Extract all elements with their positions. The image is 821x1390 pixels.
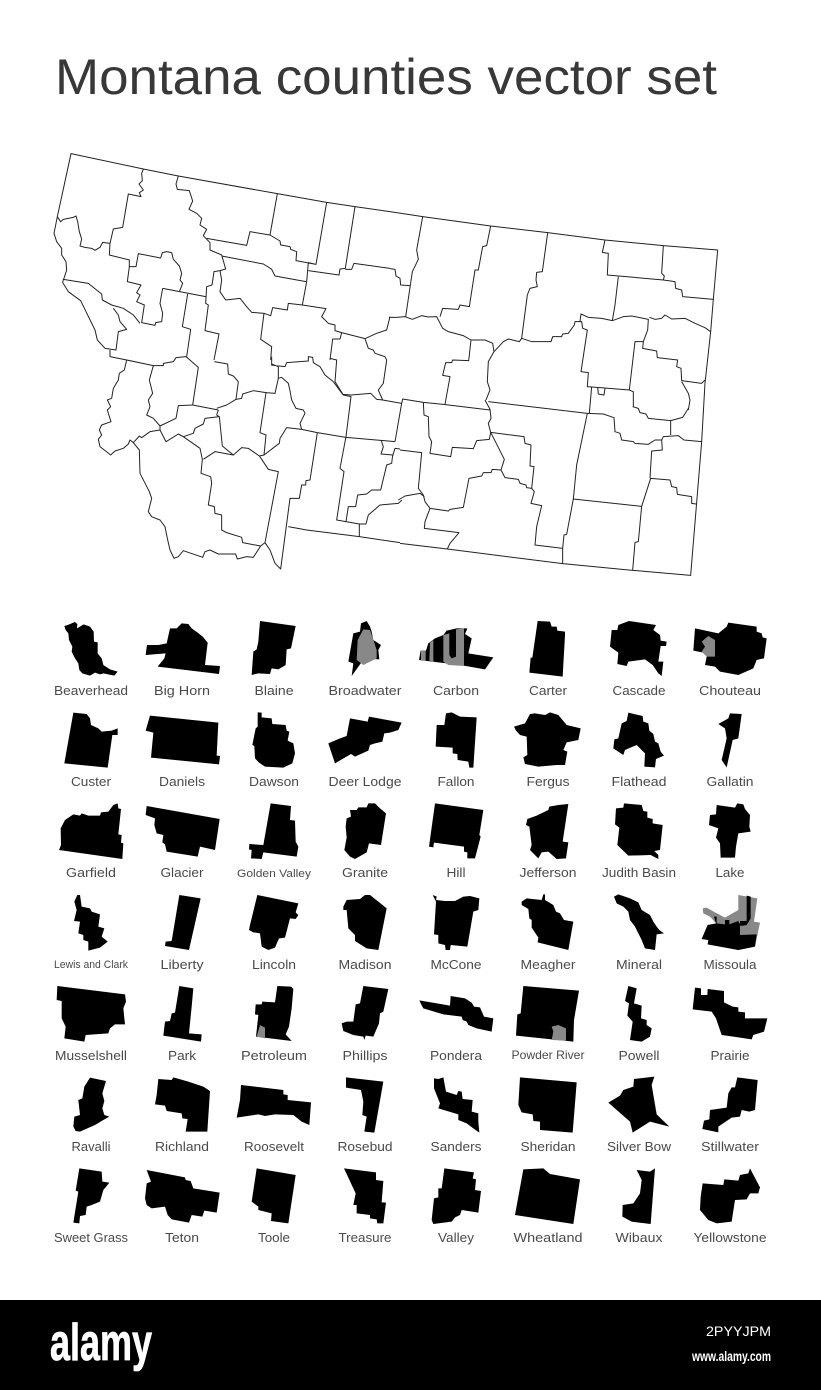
- county: Richland: [155, 1077, 210, 1154]
- county: Broadwater: [328, 621, 402, 698]
- county: Pondera: Pondera: [430, 1048, 483, 1063]
- county: Lewis and Clark: Lewis and Clark: [54, 959, 128, 971]
- county: Toole: [252, 1168, 296, 1245]
- county: Yellowstone: [694, 1168, 766, 1245]
- county: Powder River: [512, 986, 584, 1062]
- county: Prairie: [693, 988, 767, 1063]
- county: Silver Bow: [607, 1077, 672, 1154]
- county: Deer Lodge: [328, 717, 402, 789]
- county: Fallon: [436, 712, 477, 789]
- county: Powell: Powell: [618, 1048, 660, 1063]
- county: Garfield: Garfield: [66, 865, 116, 880]
- county: McCone: McCone: [430, 957, 482, 972]
- county: Dawson: Dawson: [249, 774, 299, 789]
- county: Ravalli: [72, 1078, 111, 1154]
- title: Montana counties vector set: [55, 49, 717, 105]
- county: Fergus: Fergus: [526, 774, 570, 789]
- county: Carter: [529, 621, 568, 698]
- county: Teton: [145, 1170, 220, 1245]
- county: Carter: Carter: [529, 683, 568, 698]
- county: Rosebud: [338, 1077, 392, 1154]
- county: Musselshell: Musselshell: [55, 1048, 127, 1063]
- county: Toole: Toole: [258, 1230, 290, 1245]
- county: Pondera: [419, 996, 493, 1063]
- county: Cascade: [610, 621, 667, 698]
- county: Roosevelt: Roosevelt: [244, 1139, 304, 1154]
- county: Granite: [342, 803, 388, 880]
- county: Powder River: Powder River: [512, 1048, 584, 1062]
- county: Liberty: [160, 895, 204, 972]
- county: Granite: Granite: [342, 865, 388, 880]
- county: Blaine: Blaine: [254, 683, 294, 698]
- county: Golden Valley: [237, 803, 312, 880]
- website: www.alamy.com: [691, 1349, 771, 1364]
- county: Valley: [432, 1168, 481, 1245]
- image id: 2PYYJPM: [706, 1324, 771, 1339]
- county: Jefferson: Jefferson: [520, 865, 576, 880]
- county: Roosevelt: [237, 1085, 311, 1154]
- county: Sweet Grass: Sweet Grass: [54, 1230, 128, 1245]
- county: Ravalli: Ravalli: [72, 1139, 111, 1154]
- county: Prairie: Prairie: [710, 1048, 750, 1063]
- county: Phillips: [342, 986, 388, 1063]
- county: Glacier: [146, 806, 220, 880]
- county: Yellowstone: Yellowstone: [694, 1230, 766, 1245]
- county: Hill: [429, 803, 483, 880]
- county: Meagher: [520, 894, 576, 972]
- county: Wheatland: [514, 1168, 582, 1245]
- county: Lake: Lake: [716, 865, 744, 880]
- county: Musselshell: [55, 986, 127, 1063]
- county: Treasure: [338, 1168, 392, 1245]
- county: Daniels: [146, 716, 220, 789]
- county: Sweet Grass: [54, 1168, 128, 1245]
- county: Carbon: [419, 628, 493, 698]
- county: Daniels: Daniels: [159, 774, 206, 789]
- county: Wheatland: Wheatland: [514, 1230, 582, 1245]
- alamy logo: alamy: [50, 1314, 152, 1372]
- county: Mineral: [614, 894, 664, 972]
- county: Petroleum: Petroleum: [241, 1048, 307, 1063]
- county: Beaverhead: Beaverhead: [54, 683, 128, 698]
- county: Teton: Teton: [165, 1230, 199, 1245]
- county: Valley: Valley: [438, 1230, 475, 1245]
- county: Sanders: [430, 1077, 482, 1154]
- county: Gallatin: [706, 713, 754, 789]
- county: Lincoln: [249, 895, 298, 972]
- county: Park: Park: [168, 1048, 197, 1063]
- county: Glacier: Glacier: [160, 865, 204, 880]
- county: Treasure: Treasure: [338, 1230, 392, 1245]
- county: Dawson: [249, 712, 299, 789]
- county: Mineral: Mineral: [616, 957, 662, 972]
- county: Broadwater: Broadwater: [328, 683, 402, 698]
- county: Madison: Madison: [338, 957, 392, 972]
- county: Chouteau: Chouteau: [699, 683, 761, 698]
- county: Missoula: [702, 895, 760, 972]
- county: Big Horn: [146, 623, 220, 698]
- county: Powell: [618, 986, 660, 1063]
- county: Big Horn: Big Horn: [154, 683, 210, 698]
- county: Liberty: Liberty: [160, 957, 204, 972]
- county: Carbon: Carbon: [433, 683, 479, 698]
- county: Custer: Custer: [71, 774, 112, 789]
- footer band: [0, 1300, 821, 1390]
- county: Sheridan: Sheridan: [520, 1139, 576, 1154]
- county: Cascade: Cascade: [612, 683, 666, 698]
- county: Sanders: Sanders: [430, 1139, 482, 1154]
- county: Meagher: Meagher: [520, 957, 576, 972]
- county: Blaine: [252, 621, 296, 698]
- county: Judith Basin: [602, 803, 676, 880]
- county: Deer Lodge: Deer Lodge: [328, 774, 402, 789]
- county: Golden Valley: Golden Valley: [237, 868, 312, 880]
- county: Madison: [338, 895, 392, 972]
- county: Stillwater: [701, 1077, 760, 1154]
- county: Flathead: Flathead: [612, 774, 666, 789]
- county: Sheridan: [518, 1077, 577, 1154]
- county: McCone: [430, 895, 482, 972]
- county: Rosebud: Rosebud: [338, 1139, 392, 1154]
- county: Custer: [64, 713, 118, 789]
- county: Wibaux: Wibaux: [616, 1230, 663, 1245]
- county: Park: [163, 986, 202, 1063]
- county: Jefferson: [520, 804, 576, 880]
- county: Fallon: Fallon: [438, 774, 474, 789]
- county: Fergus: [514, 712, 581, 789]
- county: Petroleum: [241, 986, 307, 1063]
- county: Hill: Hill: [446, 865, 466, 880]
- county: Lincoln: Lincoln: [252, 957, 296, 972]
- county: Judith Basin: Judith Basin: [602, 865, 676, 880]
- map: Montana county outlines: [54, 154, 718, 575]
- county: Garfield: [59, 803, 123, 880]
- county: Stillwater: Stillwater: [701, 1139, 760, 1154]
- county: Phillips: Phillips: [342, 1048, 388, 1063]
- county: Missoula: Missoula: [704, 957, 757, 972]
- county: Beaverhead: [54, 622, 128, 698]
- county: Gallatin: Gallatin: [706, 774, 754, 789]
- county: Lewis and Clark: [54, 895, 128, 971]
- county: Wibaux: [616, 1168, 663, 1245]
- county: Flathead: [612, 713, 666, 789]
- county: Lake: [709, 803, 751, 880]
- county: Silver Bow: Silver Bow: [607, 1139, 672, 1154]
- county: Richland: Richland: [155, 1139, 209, 1154]
- county: Chouteau: [693, 623, 767, 698]
